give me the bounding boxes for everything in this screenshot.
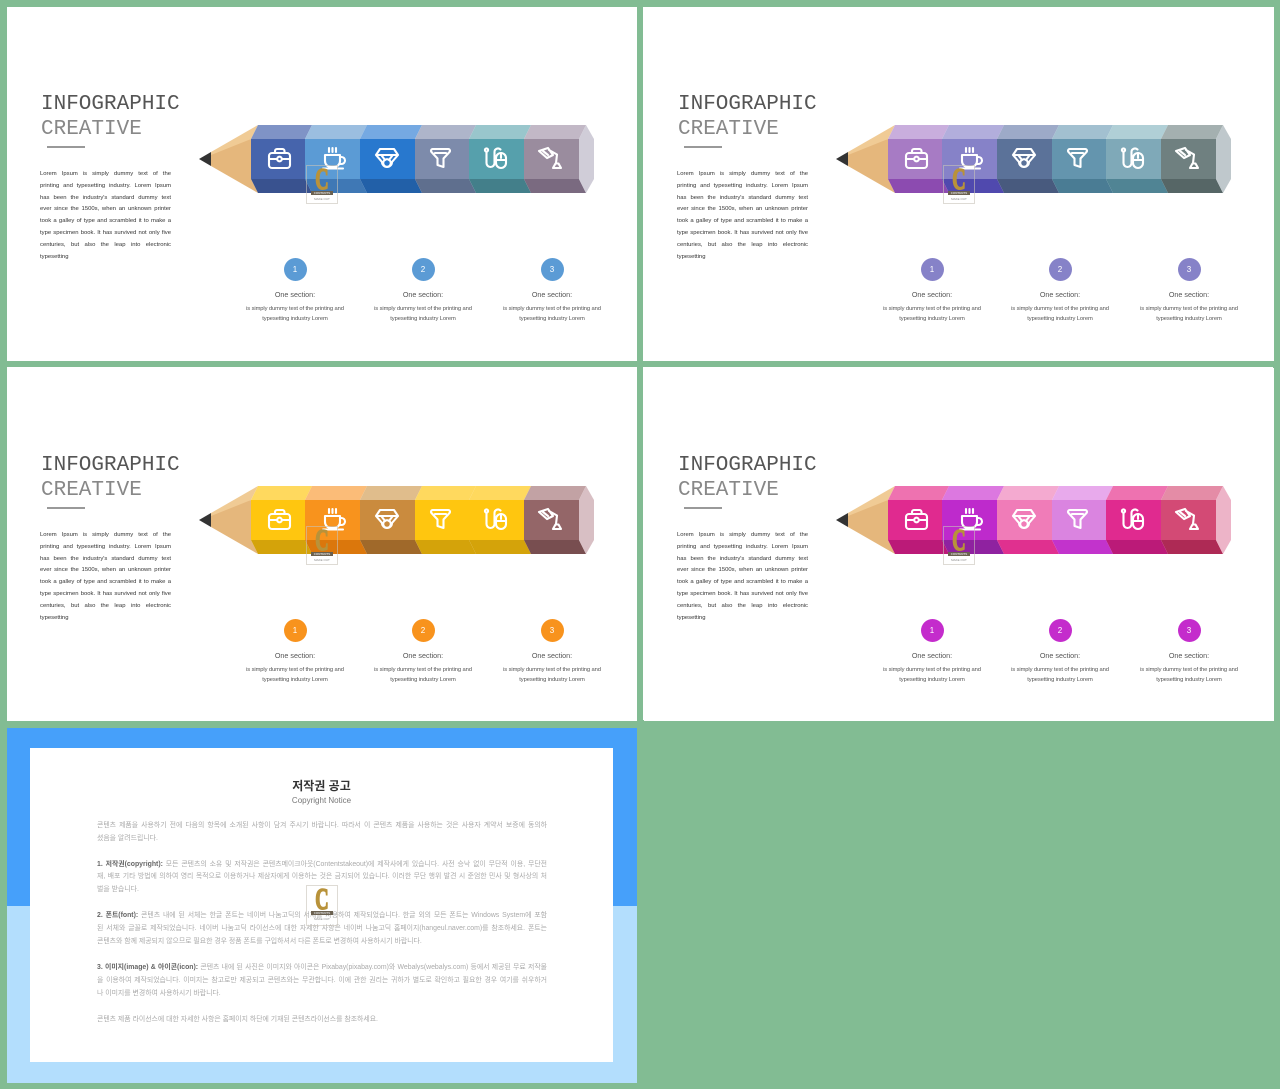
body text block xyxy=(677,171,808,260)
panel: copyright notice slide xyxy=(7,728,637,1083)
watermark logo: CONTENTS xyxy=(314,911,330,915)
step 3: One section: xyxy=(1169,290,1209,299)
step 3: One section: xyxy=(532,651,572,660)
step 3: 3 xyxy=(550,626,554,635)
title line 2: CREATIVE xyxy=(41,118,142,141)
segment 5 xyxy=(469,125,531,193)
panel: purple pencil slide xyxy=(644,7,1274,361)
notice body text: 2. 폰트(font): 콘텐츠 내에 된 서체는 한글 폰트는 네이버 나눔고딕의 서체를 사용하여 제작되었습니다. 한글 외의 모든 폰트는 Windows System에 포함 xyxy=(97,912,547,919)
step 3: One section: xyxy=(1169,651,1209,660)
title line 1: INFOGRAPHIC xyxy=(41,454,180,477)
segment 4 xyxy=(1052,486,1113,554)
step 3: typesetting industry Lorem xyxy=(1156,316,1222,322)
segment 1 xyxy=(888,125,949,193)
panel: pink pencil slide: printing and typesetting industry. Lorem Ipsum xyxy=(677,544,808,550)
title line 2: CREATIVE xyxy=(678,118,779,141)
white notice card xyxy=(30,748,613,1062)
panel: yellow pencil slide: typesetting xyxy=(40,615,68,621)
panel: pink pencil slide: centuries, but also the leap into electronic xyxy=(677,603,808,609)
segment 2 xyxy=(942,125,1004,193)
step 1: One section: xyxy=(275,290,315,299)
segment 2 xyxy=(305,125,367,193)
step 2: typesetting industry Lorem xyxy=(390,677,456,683)
segment 3 xyxy=(997,125,1059,193)
panel: purple pencil slide: Lorem Ipsum is simply dummy text of the xyxy=(677,171,808,177)
panel: blue pencil slide: Lorem Ipsum is simply dummy text of the xyxy=(40,171,171,177)
step 1: is simply dummy text of the printing and xyxy=(246,667,344,673)
step 1: 1 xyxy=(293,626,297,635)
step 3 xyxy=(1140,619,1238,683)
segment 5 xyxy=(1106,486,1168,554)
panel: blue pencil slide: centuries, but also the leap into electronic xyxy=(40,242,171,248)
step 1: typesetting industry Lorem xyxy=(899,316,965,322)
watermark logo: MAKE OUT xyxy=(314,197,330,201)
segment 1 xyxy=(251,486,312,554)
segment 1 xyxy=(251,125,312,193)
step 1: typesetting industry Lorem xyxy=(262,677,328,683)
body text block xyxy=(677,532,808,621)
panel: pink pencil slide: took a galley of type and scrambled it to make a xyxy=(677,579,808,585)
title line 1: INFOGRAPHIC xyxy=(41,93,180,116)
step 3: One section: xyxy=(532,290,572,299)
step 2: One section: xyxy=(403,651,443,660)
segment 4 xyxy=(415,125,476,193)
panel: yellow pencil slide: Lorem Ipsum is simply dummy text of the xyxy=(40,532,171,538)
step 3: is simply dummy text of the printing and xyxy=(1140,667,1238,673)
watermark logo: MAKE OUT xyxy=(951,558,967,562)
step 2 xyxy=(374,258,472,322)
panel: yellow pencil slide: took a galley of type and scrambled it to make a xyxy=(40,579,171,585)
step 2: is simply dummy text of the printing and xyxy=(374,667,472,673)
panel: blue pencil slide: has been the industry's standard dummy text xyxy=(40,195,171,201)
notice subheading: Copyright Notice xyxy=(292,796,351,805)
step 3: typesetting industry Lorem xyxy=(519,677,585,683)
segment 6 xyxy=(1161,486,1223,554)
step 1: One section: xyxy=(912,290,952,299)
panel: purple pencil slide: centuries, but also the leap into electronic xyxy=(677,242,808,248)
step 1: 1 xyxy=(293,265,297,274)
notice body text: 3. 이미지(image) & 아이콘(icon): 콘텐츠 내에 된 사진은 이미지와 아이콘은 Pixabay(pixabay.com)와 Webalys(webalys.com) 등에서 제공된 무료 저작물 xyxy=(97,964,547,971)
watermark logo xyxy=(306,885,338,926)
pencil tip xyxy=(199,125,258,193)
divider rule under title xyxy=(47,146,85,148)
step 1 xyxy=(246,258,344,322)
segment 4 xyxy=(415,486,476,554)
step 2: One section: xyxy=(1040,290,1080,299)
step 2 xyxy=(1011,258,1109,322)
step 1: is simply dummy text of the printing and xyxy=(883,667,981,673)
panel: yellow pencil slide: has been the industry's standard dummy text xyxy=(40,556,171,562)
watermark logo: MAKE OUT xyxy=(314,558,330,562)
segment 5 xyxy=(469,486,531,554)
pencil tip xyxy=(836,486,895,554)
segment 3 xyxy=(360,486,422,554)
panel: yellow pencil slide: type specimen book. It has survived not only five xyxy=(40,591,171,597)
pencil diagram xyxy=(836,486,1231,554)
title line 2: CREATIVE xyxy=(41,479,142,502)
step 2: 2 xyxy=(1058,626,1062,635)
step 3: 3 xyxy=(1187,265,1191,274)
step 3 xyxy=(1140,258,1238,322)
panel: purple pencil slide: type specimen book. It has survived not only five xyxy=(677,230,808,236)
notice body text: 재, 배포 기타 방법에 의하여 영리 목적으로 이용하거나 제삼자에게 이용하는 것은 금지되어 있습니다. 이러한 무단 행위 발견 시 준엄한 민사 및 형사상의 처 xyxy=(97,873,547,880)
panel: pink pencil slide: Lorem Ipsum is simply dummy text of the xyxy=(677,532,808,538)
panel: blue pencil slide: took a galley of type and scrambled it to make a xyxy=(40,218,171,224)
notice heading: 저작권 공고 xyxy=(292,779,351,793)
panel: pink pencil slide: ever since the 1500s, when an unknown printer xyxy=(677,567,808,573)
panel: yellow pencil slide xyxy=(7,368,637,721)
step 3: is simply dummy text of the printing and xyxy=(503,667,601,673)
title line 1: INFOGRAPHIC xyxy=(678,454,817,477)
step 1: is simply dummy text of the printing and xyxy=(883,306,981,312)
body text block xyxy=(40,532,171,621)
divider rule under title xyxy=(47,507,85,508)
segment 3 xyxy=(360,125,422,193)
watermark logo xyxy=(306,165,338,204)
step 3: 3 xyxy=(1187,626,1191,635)
watermark logo xyxy=(943,165,975,204)
divider rule under title xyxy=(684,146,722,148)
pencil tip xyxy=(199,486,258,554)
step 1 xyxy=(883,619,981,683)
step 3: typesetting industry Lorem xyxy=(519,316,585,322)
panel: purple pencil slide: has been the industry's standard dummy text xyxy=(677,195,808,201)
panel: blue pencil slide: ever since the 1500s, when an unknown printer xyxy=(40,206,171,212)
segment 6 xyxy=(524,486,586,554)
step 1: typesetting industry Lorem xyxy=(262,316,328,322)
step 1: is simply dummy text of the printing and xyxy=(246,306,344,312)
pencil end cap xyxy=(579,486,594,554)
step 1: typesetting industry Lorem xyxy=(899,677,965,683)
panel: yellow pencil slide: centuries, but also the leap into electronic xyxy=(40,603,171,609)
watermark logo: CONTENTS xyxy=(314,191,330,195)
step 3: is simply dummy text of the printing and xyxy=(1140,306,1238,312)
segment 2 xyxy=(942,486,1004,554)
divider rule under title xyxy=(684,507,722,508)
step 2 xyxy=(374,619,472,683)
segment 2 xyxy=(305,486,367,554)
step 2: typesetting industry Lorem xyxy=(1027,316,1093,322)
pencil end cap xyxy=(579,125,594,193)
watermark logo: CONTENTS xyxy=(951,552,967,556)
notice body text xyxy=(97,821,547,1023)
step 3: 3 xyxy=(550,265,554,274)
panel: purple pencil slide: ever since the 1500s, when an unknown printer xyxy=(677,206,808,212)
segment 5 xyxy=(1106,125,1168,193)
step 2: 2 xyxy=(421,626,425,635)
notice body text: 벌을 받습니다. xyxy=(97,886,139,893)
notice body text: 콘텐츠 제품을 사용하기 전에 다음의 항목에 소개된 사항이 담겨 주시기 바랍니다. 따라서 이 콘텐츠 제품을 사용하는 것은 사용자 계약서 보증에 동의하 xyxy=(97,822,547,829)
step 2: typesetting industry Lorem xyxy=(390,316,456,322)
pencil tip xyxy=(836,125,895,193)
step 2: is simply dummy text of the printing and xyxy=(1011,306,1109,312)
step 2: One section: xyxy=(403,290,443,299)
watermark logo: MAKE OUT xyxy=(951,197,967,201)
panel: pink pencil slide: type specimen book. It has survived not only five xyxy=(677,591,808,597)
step 3 xyxy=(503,619,601,683)
watermark logo: MAKE OUT xyxy=(314,917,330,921)
body text block xyxy=(40,171,171,260)
panel: yellow pencil slide: printing and typesetting industry. Lorem Ipsum xyxy=(40,544,171,550)
panel: blue pencil slide: printing and typesetting industry. Lorem Ipsum xyxy=(40,183,171,189)
notice body text: 된 서체와 글꼴로 제작되었습니다. 네이버 나눔고딕 라이선스에 대한 자세한 사항은 네이버 나눔고딕 홈페이지(hangeul.naver.com)를 참조하세요. 폰트는 xyxy=(97,925,547,932)
pencil end cap xyxy=(1216,125,1231,193)
panel: purple pencil slide: took a galley of type and scrambled it to make a xyxy=(677,218,808,224)
watermark logo: CONTENTS xyxy=(314,552,330,556)
step 2: One section: xyxy=(1040,651,1080,660)
notice body text: 을 이용하여 제작되었습니다. 이미지는 참고로만 제공되고 콘텐츠와는 무관합니다. 이에 관한 권리는 귀하가 별도로 확인하고 필요한 경우 여기를 쉬우하거 xyxy=(97,977,547,984)
notice body text: 1. 저작권(copyright): 모든 콘텐츠의 소유 및 저작권은 콘텐츠메이크아웃(Contentstakeout)에 제작사에게 있습니다. 사전 승낙 없이 무단적 이용, 무단전 xyxy=(97,861,547,868)
step 1: One section: xyxy=(275,651,315,660)
panel: blue pencil slide: type specimen book. It has survived not only five xyxy=(40,230,171,236)
notice body text: 콘텐츠 제품 라이선스에 대한 자세한 사항은 홈페이지 하단에 기재된 콘텐츠라이선스를 참조하세요. xyxy=(97,1016,378,1023)
panel: pink pencil slide: has been the industry's standard dummy text xyxy=(677,556,808,562)
segment 6 xyxy=(1161,125,1223,193)
watermark logo: CONTENTS xyxy=(951,191,967,195)
step 1: One section: xyxy=(912,651,952,660)
panel: yellow pencil slide: ever since the 1500s, when an unknown printer xyxy=(40,567,171,573)
step 2: 2 xyxy=(1058,265,1062,274)
panel: blue pencil slide: typesetting xyxy=(40,254,68,260)
notice body text: 콘텐츠와 함께 제공되지 않으므로 필요한 경우 정품 폰트를 구입하셔서 다른 폰트로 변경하여 사용하시기 바랍니다. xyxy=(97,938,422,945)
notice body text: 나 이미지를 변경하여 사용하시기 바랍니다. xyxy=(97,990,221,997)
pencil diagram xyxy=(199,486,594,554)
step 1 xyxy=(246,619,344,683)
title line 1: INFOGRAPHIC xyxy=(678,93,817,116)
panel: pink pencil slide: typesetting xyxy=(677,615,706,621)
pencil diagram xyxy=(199,125,594,193)
step 2: is simply dummy text of the printing and xyxy=(374,306,472,312)
panel: pink pencil slide xyxy=(644,368,1274,721)
step 1: 1 xyxy=(930,265,934,274)
title line 2: CREATIVE xyxy=(678,479,779,502)
segment 3 xyxy=(997,486,1059,554)
watermark logo xyxy=(306,526,338,565)
panel: purple pencil slide: printing and typesetting industry. Lorem Ipsum xyxy=(677,183,808,189)
step 2: typesetting industry Lorem xyxy=(1027,677,1093,683)
panel: blue pencil slide xyxy=(7,7,637,361)
pencil end cap xyxy=(1216,486,1231,554)
segment 1 xyxy=(888,486,949,554)
step 2 xyxy=(1011,619,1109,683)
notice body text: 셨음을 알려드립니다. xyxy=(97,835,158,842)
step 1: 1 xyxy=(930,626,934,635)
step 3: is simply dummy text of the printing and xyxy=(503,306,601,312)
panel: purple pencil slide: typesetting xyxy=(677,254,706,260)
step 3 xyxy=(503,258,601,322)
step 2: 2 xyxy=(421,265,425,274)
step 3: typesetting industry Lorem xyxy=(1156,677,1222,683)
segment 6 xyxy=(524,125,586,193)
step 1 xyxy=(883,258,981,322)
watermark logo xyxy=(943,526,975,565)
step 2: is simply dummy text of the printing and xyxy=(1011,667,1109,673)
pencil diagram xyxy=(836,125,1231,193)
segment 4 xyxy=(1052,125,1113,193)
